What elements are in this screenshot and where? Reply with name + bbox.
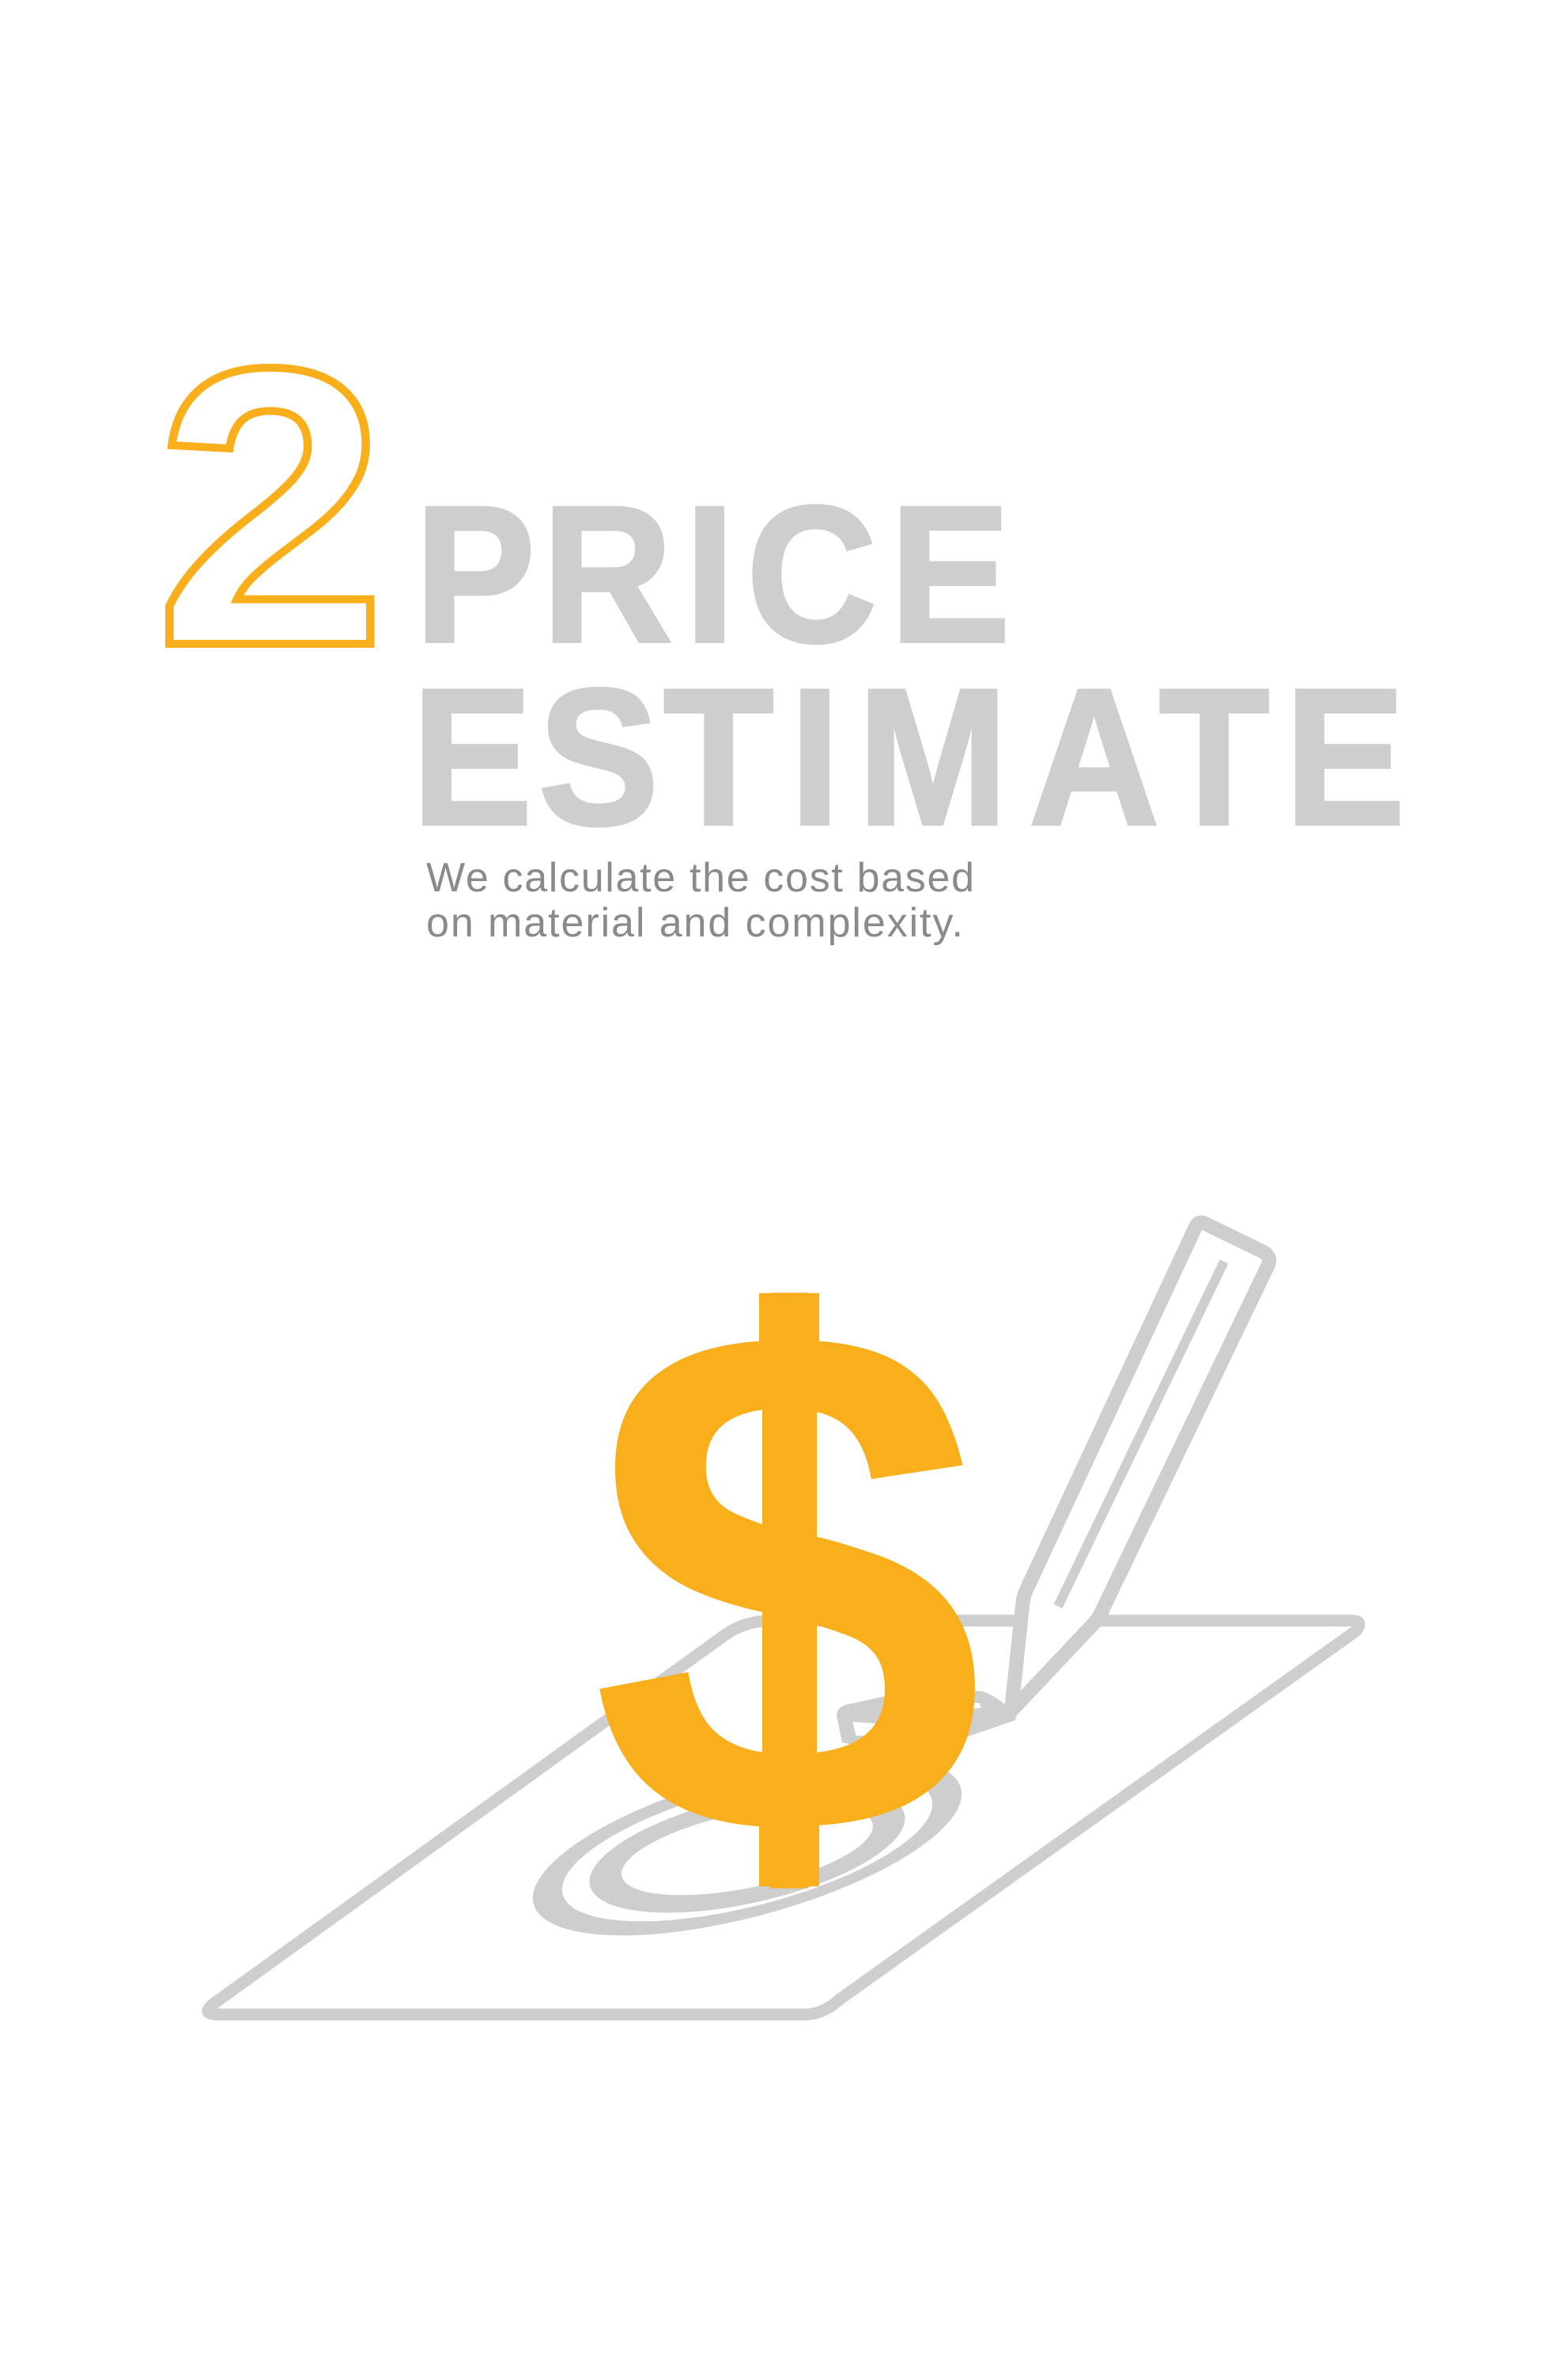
heading: price estimate: PRICE [415,466,1011,683]
heading: price estimate [412,466,1405,866]
icon: signature scribble [515,1691,1017,1972]
heading: price estimate: ESTIMATE [412,649,1405,866]
description text [426,855,974,946]
step number 2 outline: 2 [155,286,387,728]
illustration: pencil signing paper with dollar sign [208,1174,1359,2014]
icon: dollar sign: $ [590,1174,985,1989]
description text: on material and complexity. [426,900,963,946]
icon: sheet of paper [208,1621,1359,2014]
icon: pencil [1011,1223,1269,1711]
description text: We calculate the cost based [426,855,974,901]
